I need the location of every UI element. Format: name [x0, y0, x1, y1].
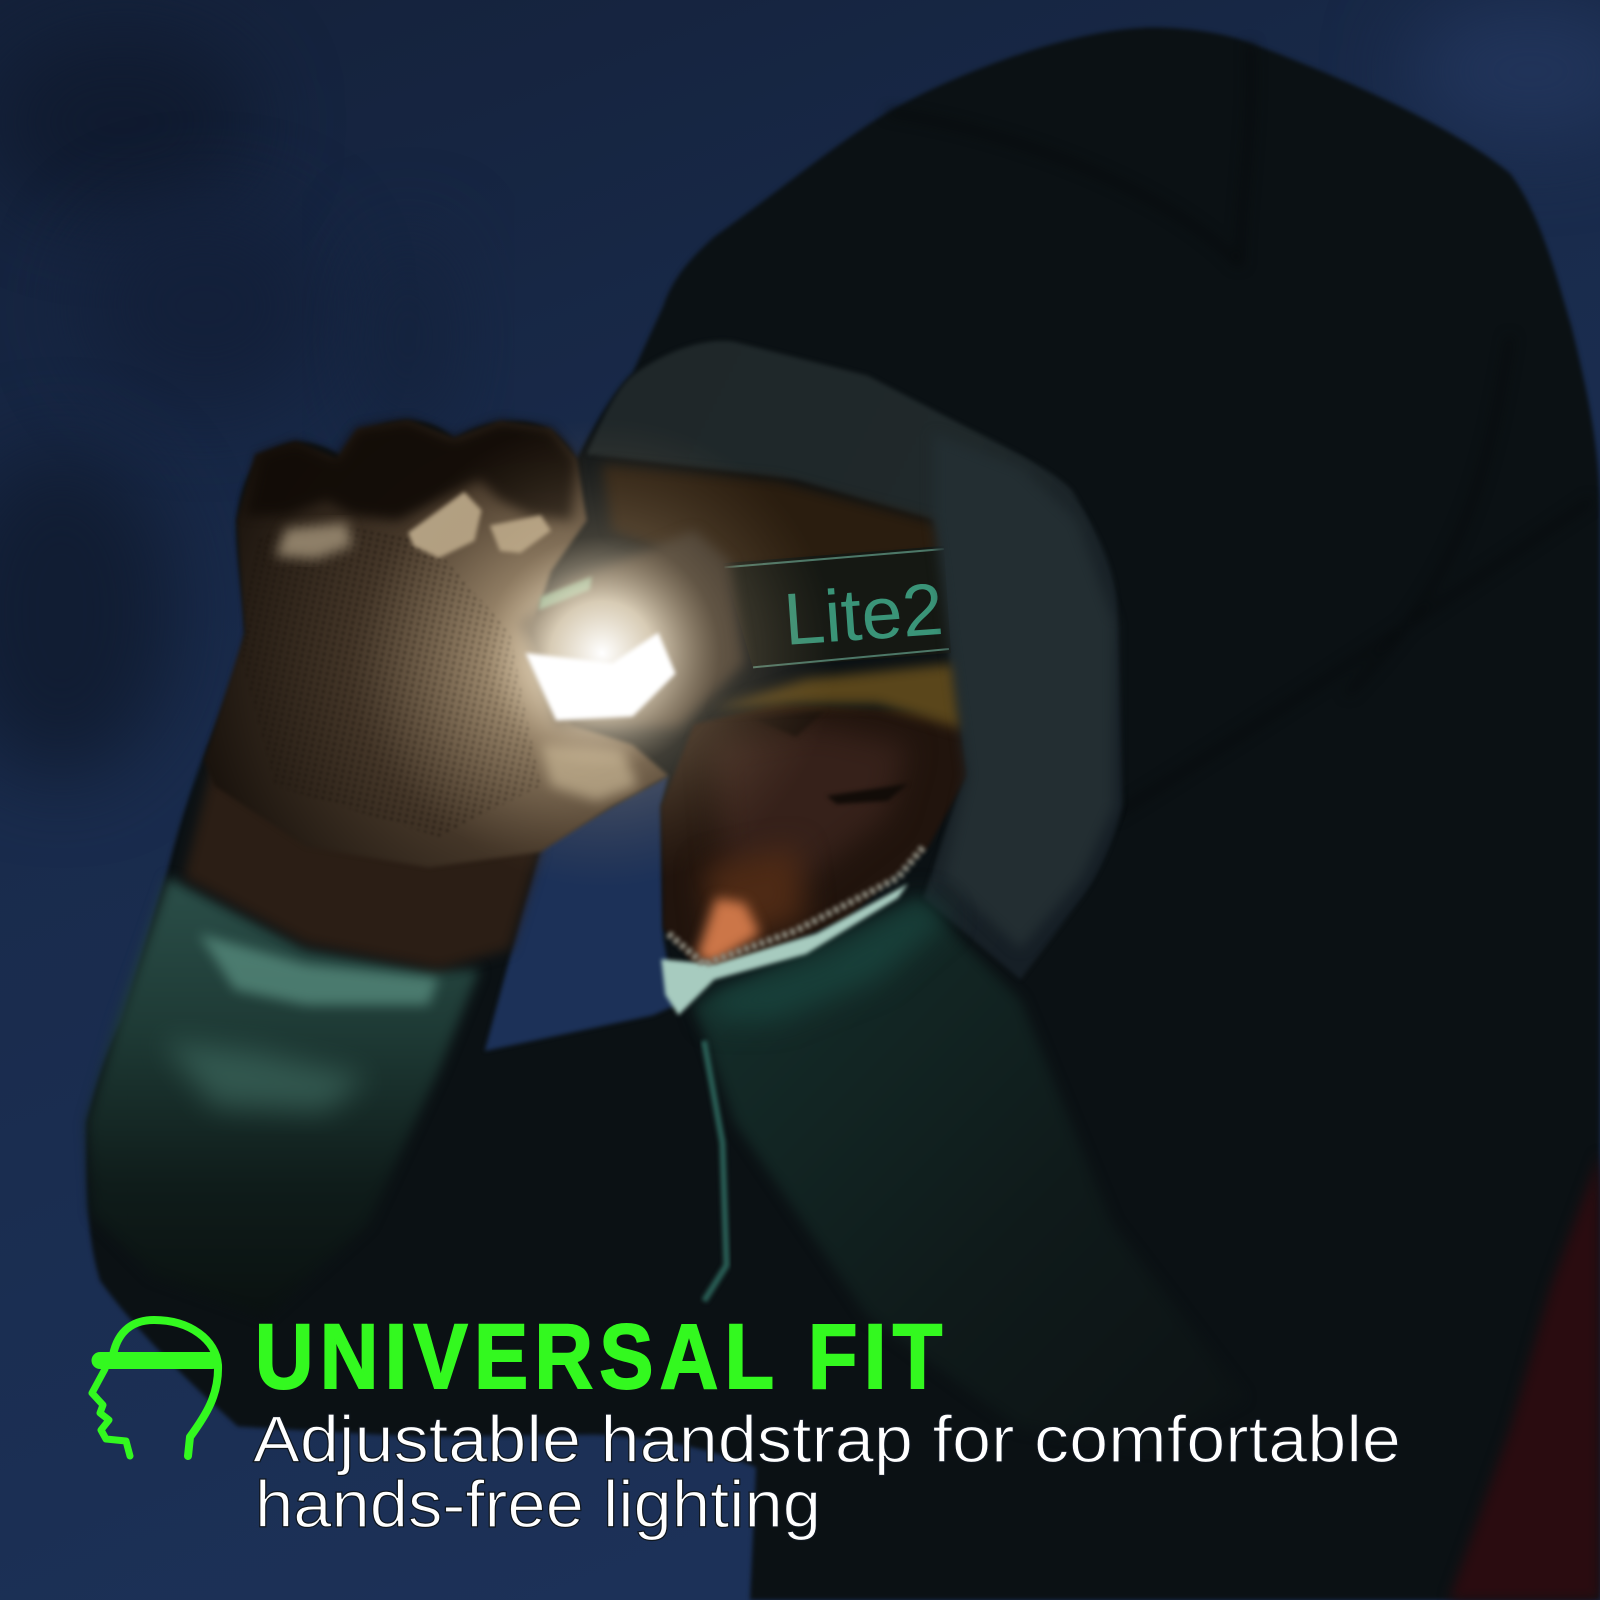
body text: Adjustable handstrap for comfortable: [253, 1402, 1401, 1476]
sleeve: [87, 878, 480, 1316]
hood lining edge over strap: [934, 434, 1114, 949]
knuckle shadows: [245, 420, 577, 520]
fingertip highlights: [276, 522, 352, 559]
face: [661, 704, 967, 964]
chest panel: [694, 898, 1245, 1449]
red strap bottom right: [1449, 1153, 1600, 1600]
glove: [204, 420, 668, 867]
hood lining: [587, 341, 1122, 980]
lamp lens: [526, 633, 676, 720]
gap between arm and face: [485, 776, 676, 1051]
icon: head with headband: [92, 1320, 218, 1456]
body text: hands-free lighting: [255, 1467, 821, 1541]
lamp glow: [367, 418, 837, 888]
zipper pull cord: [704, 1041, 727, 1301]
beanie: [602, 464, 964, 730]
body text: [253, 1402, 1401, 1541]
collar fleece: [661, 847, 949, 1020]
strap logo: Lite2: [781, 567, 946, 661]
hood quilting seams: [888, 43, 1592, 816]
headlamp: [367, 418, 837, 888]
heading: UNIVERSAL FIT: [255, 1306, 949, 1408]
glove cuff: [184, 755, 541, 969]
headband strap: [722, 546, 951, 668]
